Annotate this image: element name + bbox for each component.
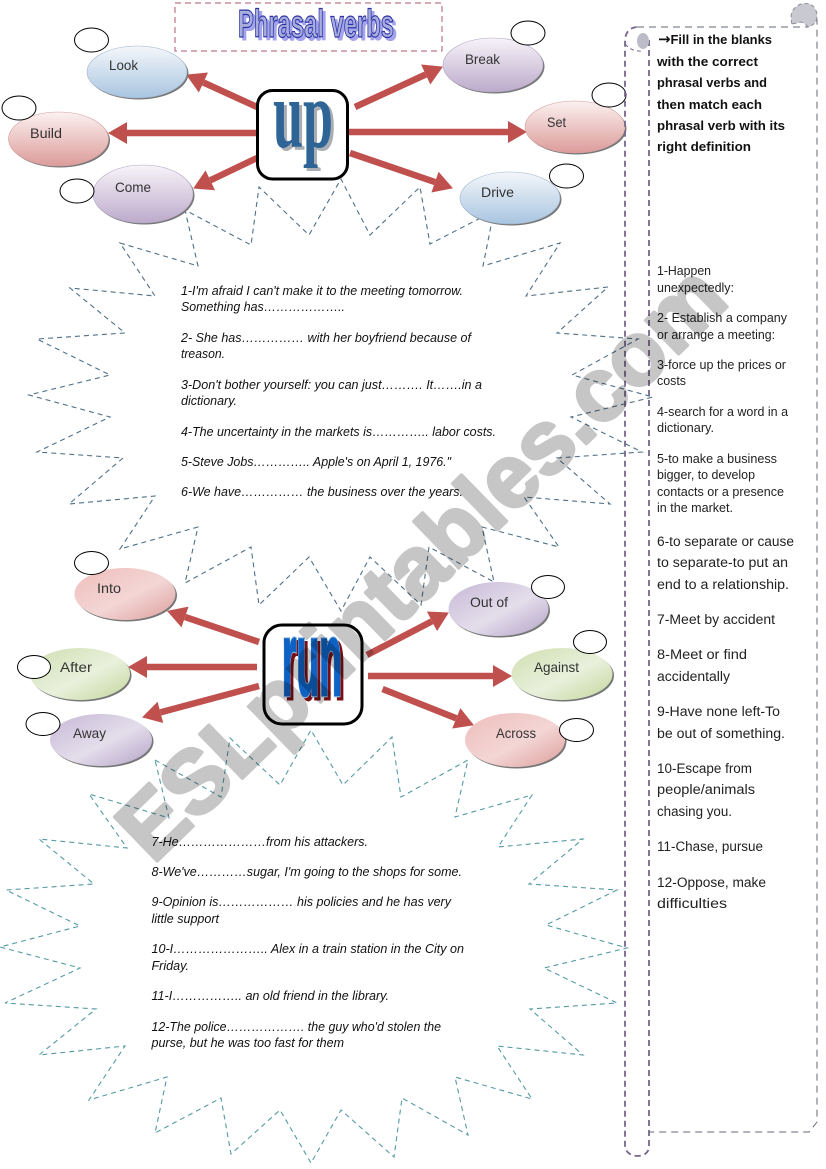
- arrow to Out of: [367, 621, 432, 655]
- node: Into: Into: [97, 580, 121, 596]
- node: Into: [74, 552, 177, 622]
- center box: up: [258, 61, 348, 179]
- exercise text: sentences 7-12: 12-The police………………. the guy who'd stolen the: [152, 1020, 441, 1034]
- node: Out of: [448, 576, 564, 638]
- arrow to After: [147, 664, 257, 670]
- exercise text: sentences 1-6: 5-Steve Jobs………….. Apple's on April 1, 1976.": [181, 455, 452, 469]
- exercise text: sentences 7-12: 10-I………………….. Alex in a train station in the City on: [152, 942, 464, 956]
- exercise text: sentences 7-12: 8-We've…………sugar, I'm going to the shops for some.: [152, 865, 462, 879]
- diagram: run: [18, 552, 614, 768]
- arrow to Break: [355, 74, 426, 107]
- exercise text: sentences 7-12: purse, but he was too fast for them: [150, 1036, 344, 1050]
- title box: Phrasal verbs: [241, 6, 397, 49]
- node: Look: [74, 28, 188, 100]
- definitions list: 11-Chase, pursue: [657, 839, 763, 854]
- node: Away: Away: [73, 725, 106, 741]
- definitions list: bigger, to develop: [657, 468, 755, 482]
- diagram: run: run: [282, 601, 342, 718]
- node: Come: Come: [115, 179, 151, 195]
- definitions list: 7-Meet by accident: [657, 612, 775, 627]
- node: Drive: [460, 164, 584, 226]
- node: Build: Build: [30, 125, 62, 141]
- star outline: upper exercise: [29, 179, 653, 611]
- center box: up: up: [273, 61, 333, 169]
- exercise text: sentences 1-6: dictionary.: [181, 394, 237, 408]
- node: Across: [465, 713, 594, 768]
- node: Break: [443, 21, 545, 94]
- instructions: phrasal verbs and: [657, 75, 767, 90]
- diagram: run: run: [282, 601, 342, 718]
- center box: up: up: [276, 64, 336, 172]
- node: Out of: Out of: [470, 594, 508, 610]
- instructions: then match each: [657, 97, 762, 112]
- exercise text: sentences 7-12: Friday.: [152, 959, 189, 973]
- instructions: with the correct: [656, 54, 759, 69]
- definitions list: dictionary.: [657, 421, 714, 435]
- exercise text: sentences 1-6: 1-I'm afraid I can't make it to the meeting tomorrow.: [181, 284, 463, 298]
- arrow to Drive: [350, 153, 435, 182]
- node: Away: [26, 712, 154, 768]
- exercise text: sentences 1-6: Something has………………..: [181, 300, 345, 314]
- node: Look: Look: [109, 57, 139, 73]
- node: Set: [525, 83, 626, 154]
- instructions: right definition: [657, 139, 751, 154]
- scroll panel frame: [625, 3, 817, 1156]
- arrow to Against: [368, 673, 493, 679]
- node: Against: Against: [534, 659, 579, 675]
- definitions list: be out of something.: [657, 726, 785, 741]
- definitions list: unexpectedly:: [657, 281, 734, 295]
- definitions list: 10-Escape from: [657, 761, 752, 776]
- exercise text: sentences 1-6: treason.: [181, 347, 225, 361]
- instructions: [656, 30, 785, 154]
- node: Build: [2, 96, 110, 168]
- node: Set: Set: [547, 114, 566, 130]
- definitions list: end to a relationship.: [657, 577, 789, 592]
- definitions list: chasing you.: [657, 804, 732, 819]
- exercise text: sentences 1-6: 2- She has…………… with her boyfriend because of: [180, 331, 473, 345]
- exercise text: sentences 1-6: 4-The uncertainty in the markets is………….. labor costs.: [181, 425, 496, 439]
- arrow to Build: [127, 130, 257, 136]
- star outline: lower exercise: [0, 730, 627, 1163]
- definitions list: difficulties: [657, 896, 727, 911]
- definitions list: accidentally: [657, 669, 730, 684]
- definitions list: or arrange a meeting:: [657, 328, 775, 342]
- exercise text: sentences 7-12: little support: [152, 912, 220, 926]
- exercise text: sentences 1-6: 6-We have…………… the business over the years.: [181, 485, 463, 499]
- arrow to Across: [382, 689, 456, 718]
- exercise text: sentences 7-12: 11-I…………….. an old friend in the library.: [152, 989, 389, 1003]
- node: Drive: Drive: [481, 184, 514, 200]
- diagram: run: run: [285, 604, 345, 722]
- definitions list: people/animals: [657, 782, 755, 797]
- title box: Phrasal verbs: [238, 3, 394, 46]
- node: After: After: [60, 659, 92, 675]
- exercise text: sentences 1-6: [180, 284, 496, 499]
- arrow to Come: [210, 158, 257, 180]
- definitions list: 9-Have none left-To: [657, 704, 780, 719]
- node: Against: [512, 630, 614, 702]
- definitions list: in the market.: [657, 501, 733, 515]
- arrow to Look: [203, 82, 257, 107]
- node: Come: [60, 165, 194, 224]
- exercise text: sentences 1-6: 3-Don't bother yourself: you can just………. It…….in a: [181, 378, 482, 392]
- definitions list: 8-Meet or find: [657, 647, 747, 662]
- node: Break: Break: [465, 51, 501, 67]
- node: After: [18, 648, 132, 702]
- definitions list: costs: [657, 374, 686, 388]
- arrow to Into: [185, 617, 259, 642]
- exercise text: sentences 7-12: 7-He…………………from his attackers.: [152, 835, 368, 849]
- definitions list: 5-to make a business: [657, 452, 777, 466]
- definitions list: 1-Happen: [657, 264, 711, 278]
- node: Across: Across: [496, 725, 536, 741]
- title box: [175, 3, 442, 51]
- definitions list: 3-force up the prices or: [657, 358, 786, 372]
- definitions list: 12-Oppose, make: [657, 875, 766, 890]
- definitions list: 4-search for a word in a: [657, 405, 788, 419]
- arrow to Set: [348, 129, 508, 135]
- center box: run: [264, 601, 362, 724]
- instructions: phrasal verb with its: [657, 118, 785, 133]
- diagram: up: [2, 21, 626, 226]
- definitions list: to separate-to put an: [657, 555, 788, 570]
- arrow to Away: [160, 686, 259, 712]
- definitions list: [657, 264, 794, 911]
- exercise text: sentences 7-12: 9-Opinion is……………… his policies and he has very: [152, 895, 452, 909]
- exercise text: sentences 7-12: [150, 835, 464, 1050]
- instructions: →Fill in the blanks: [658, 30, 772, 48]
- definitions list: 2- Establish a company: [657, 311, 788, 325]
- watermark: ESLprintables.com: [97, 245, 744, 879]
- definitions list: 6-to separate or cause: [657, 534, 794, 549]
- definitions list: contacts or a presence: [657, 485, 784, 499]
